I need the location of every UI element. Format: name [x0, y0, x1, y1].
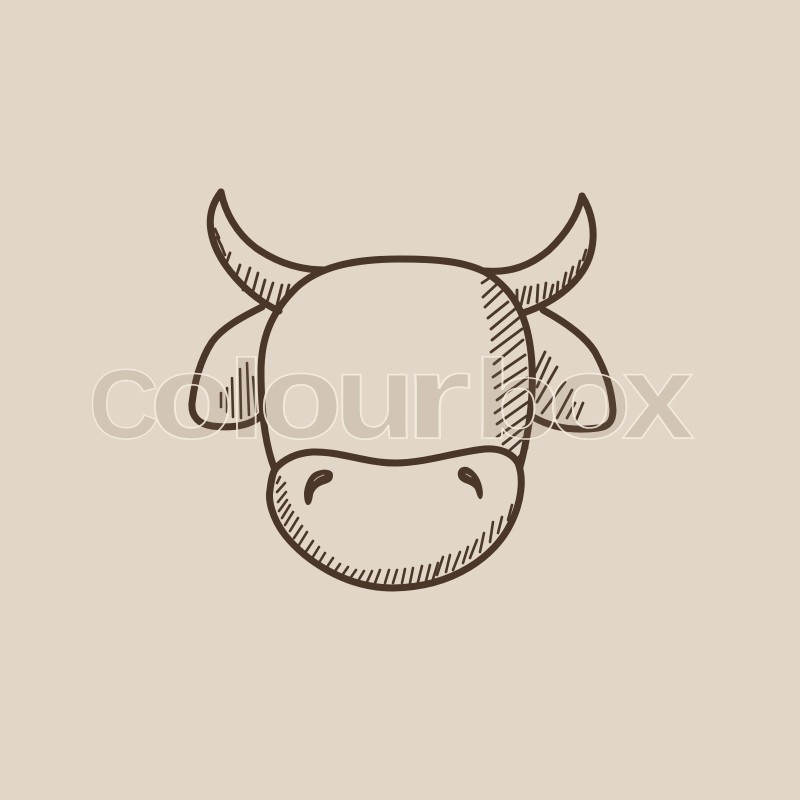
right nostril [458, 467, 483, 499]
icon: cow head [192, 192, 613, 588]
watermark: Colourbox: u [334, 330, 416, 463]
watermark: Colourbox [88, 329, 694, 464]
left nostril [304, 470, 333, 505]
right horn [485, 196, 593, 313]
watermark: Colourbox: l [228, 337, 265, 462]
watermark: Colourbox: o [548, 330, 632, 464]
head shading hatching [482, 279, 528, 458]
watermark: Colourbox: C [88, 349, 159, 459]
muzzle hatching [277, 477, 512, 583]
left horn [210, 192, 325, 311]
watermark: Colourbox: r [404, 329, 472, 464]
watermark: Colourbox: b [472, 338, 561, 462]
watermark: Colourbox: x [622, 330, 694, 464]
watermark: Colourbox: o [150, 330, 234, 464]
left ear [192, 307, 262, 427]
muzzle [270, 449, 521, 588]
watermark: Colourbox: o [258, 330, 343, 464]
head outline [261, 259, 532, 470]
right ear [533, 310, 613, 429]
